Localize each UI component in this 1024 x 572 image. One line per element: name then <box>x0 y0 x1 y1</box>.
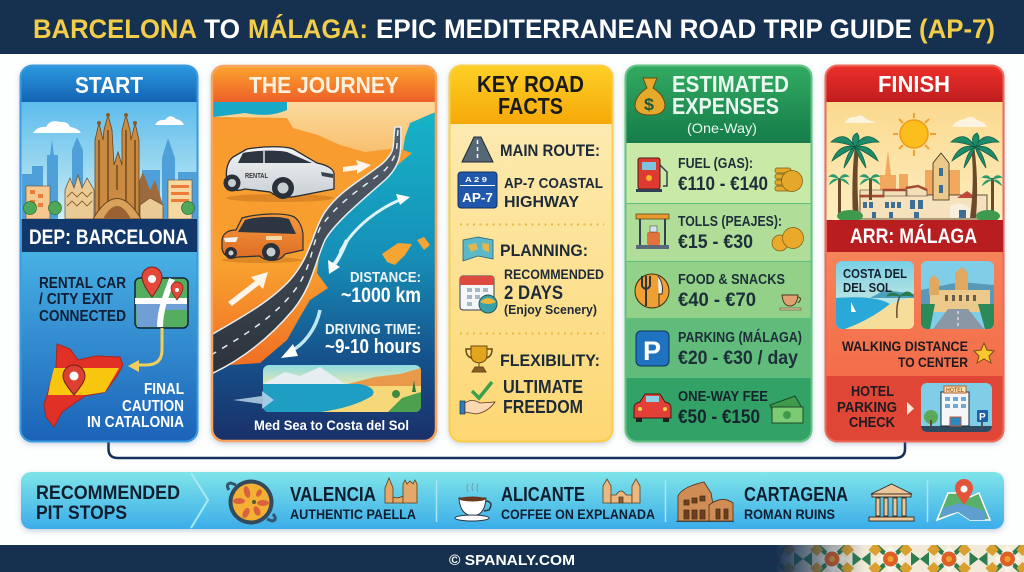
text: recommended 2 days: (Enjoy Scenery) <box>504 302 597 317</box>
icon: Alicante church <box>603 479 640 503</box>
stop: Cartagena: ROMAN RUINS <box>744 506 835 522</box>
heading: pit stops: PIT STOPS <box>36 503 127 524</box>
text: rental car: CONNECTED <box>39 308 126 325</box>
text: ultimate freedom: FREEDOM <box>503 397 583 417</box>
text: walking distance <box>842 338 968 370</box>
text: recommended 2 days: 2 DAYS <box>504 283 563 304</box>
text: rental car <box>39 275 126 325</box>
expense: food <box>635 272 801 311</box>
connector line: start to finish <box>108 440 905 458</box>
expense: food: €40 - €70 <box>678 290 756 311</box>
icon: Valencia cathedral <box>385 478 417 503</box>
panel: start <box>20 65 198 442</box>
icon: Catalonia map <box>44 344 123 427</box>
photo: Costa del Sol <box>836 261 914 329</box>
icon: hotel photo <box>921 383 992 432</box>
icon: AP-7 sign <box>458 172 497 208</box>
text: final caution: CAUTION <box>122 398 184 415</box>
text: ultimate freedom <box>503 377 583 417</box>
title: TO <box>204 14 240 44</box>
title: MÁLAGA: <box>248 13 368 44</box>
icon: calendar <box>460 276 497 313</box>
text: distance <box>341 269 421 307</box>
title: BARCELONA <box>33 14 197 44</box>
icon: star <box>974 343 994 363</box>
heading: finish: FINISH <box>878 71 950 97</box>
arrow: map to Catalonia <box>128 328 162 372</box>
text: main route: MAIN ROUTE: <box>500 141 600 160</box>
text: walking distance: TO CENTER <box>898 354 968 370</box>
departure band <box>22 219 197 252</box>
title: EPIC MEDITERRANEAN ROAD TRIP GUIDE <box>376 14 912 44</box>
text: driving time <box>325 321 421 358</box>
stop: Alicante <box>501 484 655 522</box>
heading: the journey: THE JOURNEY <box>249 72 399 98</box>
photo: Costa del Sol: DEL SOL <box>843 280 892 295</box>
expense: tolls <box>636 214 804 253</box>
stop: Valencia: VALENCIA <box>290 484 376 506</box>
text: planning: PLANNING: <box>500 241 588 260</box>
expense: one-way fee: ONE-WAY FEE <box>678 389 768 405</box>
icon: hotel photo: HOTEL <box>946 388 964 394</box>
expense: parking: €20 - €30 / day <box>678 348 798 369</box>
stop: Alicante: COFFEE ON EXPLANADA <box>501 506 655 522</box>
text: hotel parking check: PARKING <box>837 399 897 416</box>
panel: finish <box>825 65 1004 442</box>
arrow into beach <box>233 391 274 409</box>
islands <box>382 237 430 265</box>
text: hotel parking check <box>837 383 897 431</box>
header bar <box>0 0 1024 54</box>
stop: Valencia <box>290 484 416 522</box>
panel: key road facts <box>449 65 613 442</box>
text: AP-7 coastal highway: AP-7 COASTAL <box>504 175 603 192</box>
text: flexibility: FLEXIBILITY: <box>500 351 600 370</box>
expense: tolls: €15 - €30 <box>678 232 753 253</box>
arrows on map <box>228 160 371 306</box>
text: final caution: FINAL <box>144 381 184 398</box>
panel: estimated expenses <box>625 65 812 442</box>
arrival band: ARR: MÁLAGA <box>850 225 977 248</box>
expense: fuel: €110 - €140 <box>678 174 768 195</box>
text: walking distance: WALKING DISTANCE <box>842 338 968 354</box>
text: recommended 2 days: RECOMMENDED <box>504 266 604 282</box>
panel: the journey <box>211 65 437 442</box>
departure band: DEP: BARCELONA <box>29 226 188 249</box>
heading: key road facts <box>477 71 584 119</box>
illustration: Málaga skyline <box>828 113 1003 222</box>
footer credit: © SPANALY.COM <box>449 552 575 569</box>
heading: estimated expenses: EXPENSES <box>672 93 779 119</box>
icon: paper map <box>463 237 493 261</box>
heading: pit stops: RECOMMENDED <box>36 483 180 504</box>
text: distance: ~1000 km <box>341 284 421 307</box>
icon: AP-7 sign: A 2 9 <box>465 177 487 184</box>
heading: estimated expenses: ESTIMATED <box>672 71 789 97</box>
expense: food: FOOD & SNACKS <box>678 272 785 288</box>
arrow: to hotel <box>907 402 914 415</box>
orange rental car <box>222 214 303 263</box>
icon: AP-7 sign: AP-7 <box>462 190 493 205</box>
heading: key road facts: FACTS <box>498 93 563 119</box>
text: ultimate freedom: ULTIMATE <box>503 377 583 397</box>
expense: parking <box>636 329 802 369</box>
icon: trophy <box>466 346 492 372</box>
white rental car <box>224 147 334 202</box>
icon: temple <box>869 484 914 521</box>
text: final caution <box>87 381 184 431</box>
heading: pit stops <box>36 483 180 524</box>
heading: estimated expenses <box>672 71 789 136</box>
text: rental car: RENTAL CAR <box>39 275 126 292</box>
expense: fuel: FUEL (GAS): <box>678 156 753 172</box>
map land <box>211 102 437 375</box>
text: recommended 2 days <box>504 266 604 317</box>
expense: fuel <box>636 156 802 195</box>
icon: map with pins <box>135 267 188 328</box>
text: rental car: / CITY EXIT <box>39 291 113 308</box>
photo: Costa del Sol: COSTA DEL <box>843 266 907 281</box>
icon: folded map with pin <box>937 479 990 520</box>
icon: money bag: $ <box>644 95 655 114</box>
heading: key road facts: KEY ROAD <box>477 71 584 97</box>
expense: tolls: TOLLS (PEAJES): <box>678 214 782 230</box>
heading: start: START <box>75 72 143 98</box>
expense: one-way fee <box>634 389 803 428</box>
text: hotel parking check: CHECK <box>849 414 895 431</box>
icon: hand with check <box>460 382 495 414</box>
icon: colosseum <box>676 482 734 522</box>
stop: Valencia: AUTHENTIC PAELLA <box>290 506 416 522</box>
footer bar <box>0 545 1024 572</box>
text: AP-7 coastal highway: HIGHWAY <box>504 194 579 211</box>
expense: parking: P <box>643 336 661 366</box>
text: final caution: IN CATALONIA <box>87 414 184 431</box>
stop: Cartagena <box>744 484 848 522</box>
photo: Málaga street <box>921 261 994 329</box>
stop: Cartagena: CARTAGENA <box>744 484 848 506</box>
expense: one-way fee: €50 - €150 <box>678 407 760 428</box>
illustration: Barcelona skyline <box>22 113 197 219</box>
stop: Alicante: ALICANTE <box>501 484 585 506</box>
icon: road <box>462 137 493 162</box>
caption: Med Sea to Costa del Sol <box>254 417 409 433</box>
title <box>33 13 995 44</box>
panel: recommended pit stops <box>21 472 1004 529</box>
icon: hotel photo: P <box>979 412 986 423</box>
text: driving time: DRIVING TIME: <box>325 321 421 338</box>
white rental car: RENTAL <box>245 173 269 180</box>
road <box>211 127 401 374</box>
title: (AP-7) <box>919 14 995 44</box>
icon: paella <box>227 480 275 524</box>
text: distance: DISTANCE: <box>350 269 421 286</box>
illustration: beach <box>263 365 421 412</box>
arrival band <box>827 220 1003 252</box>
expense: parking: PARKING (MÁLAGA) <box>678 329 802 346</box>
text: AP-7 coastal highway <box>504 175 603 211</box>
icon: coffee cup <box>455 483 491 521</box>
text: driving time: ~9-10 hours <box>325 336 421 358</box>
text: hotel parking check: HOTEL <box>851 383 894 400</box>
heading: estimated expenses: (One-Way) <box>687 120 757 136</box>
icon: money bag <box>635 78 665 115</box>
